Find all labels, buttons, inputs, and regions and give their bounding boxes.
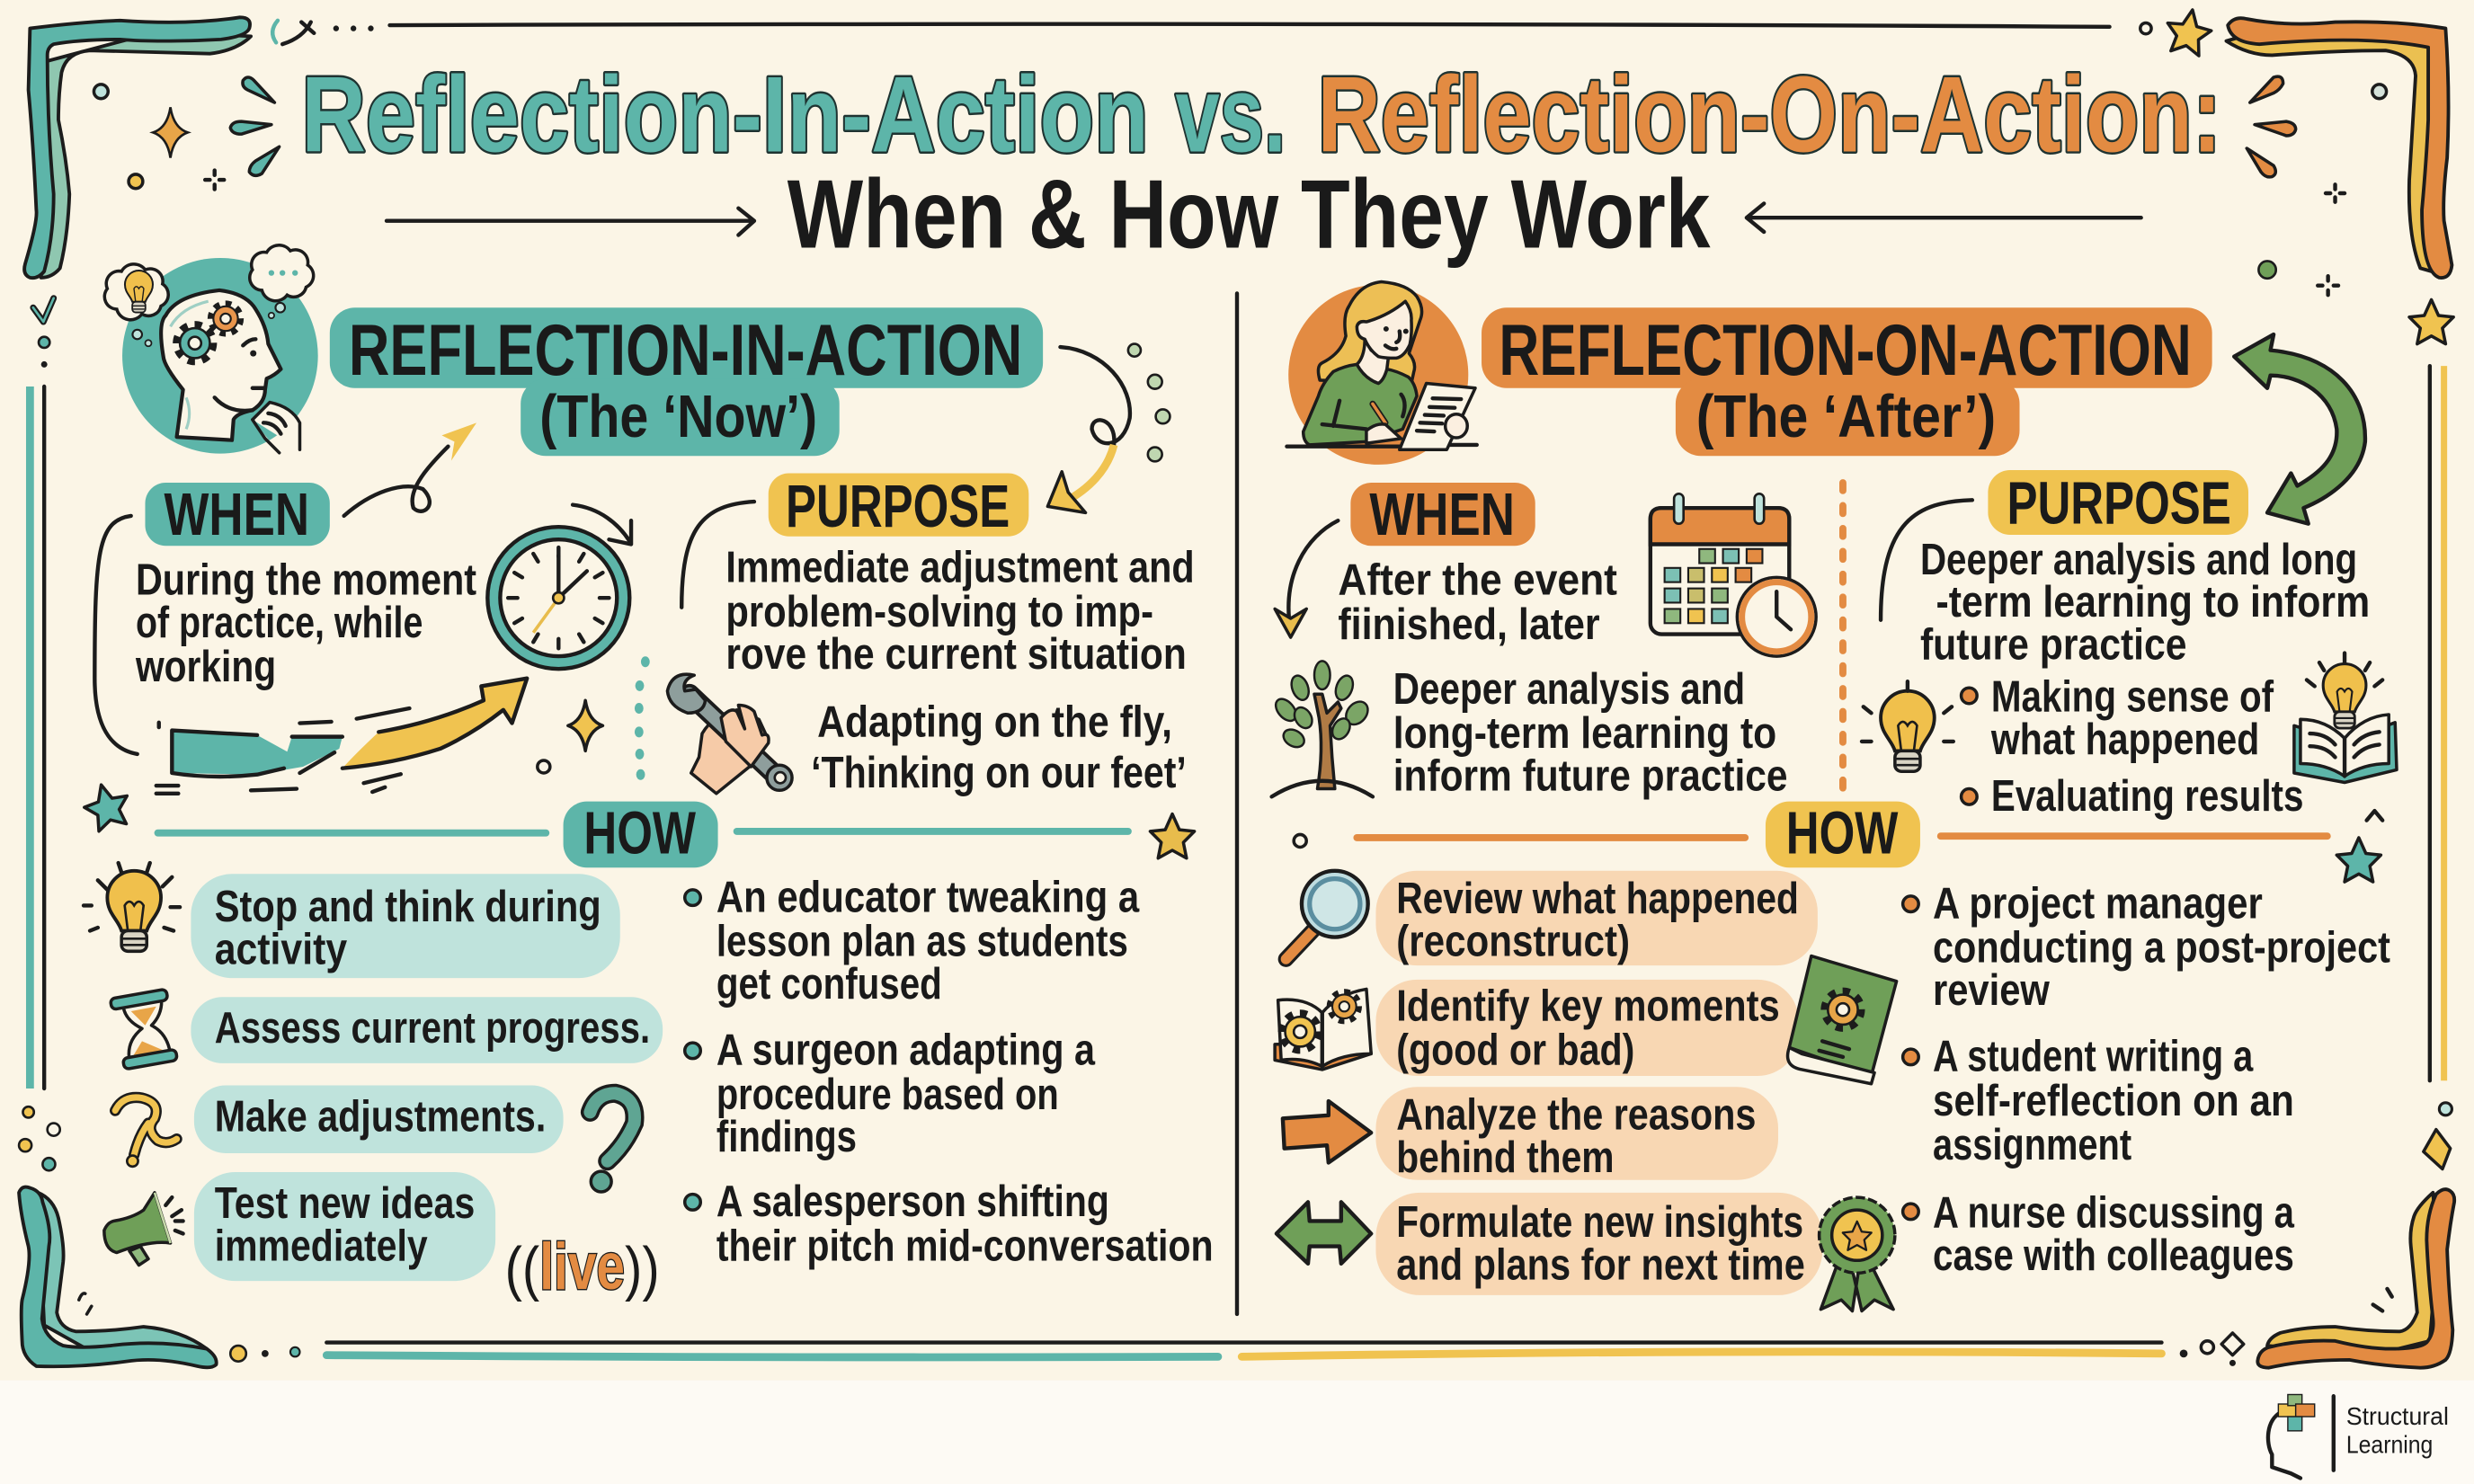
- examples list: in action: get confused: [716, 960, 942, 1009]
- icon: green double arrow: [1277, 1202, 1371, 1264]
- heading: reflection-in-action: REFLECTION-IN-ACTION: [349, 310, 1022, 391]
- when block: During the moment: [136, 556, 476, 605]
- live sound label: ((: [505, 1236, 539, 1302]
- examples list: in action: [685, 873, 1214, 1270]
- text: adapting on the fly: [811, 698, 1187, 797]
- icon: magnifying glass: [1286, 871, 1368, 959]
- examples list: on action: case with colleagues: [1933, 1231, 2294, 1280]
- border: top left corner: [24, 17, 251, 278]
- heading: reflection-in-action: [330, 307, 1043, 456]
- border: top right corner: [2226, 18, 2452, 278]
- live sound label: )): [625, 1236, 660, 1302]
- text: deeper analysis: long-term learning to: [1393, 709, 1776, 758]
- icon: hourglass: [110, 989, 177, 1070]
- step: identify: (good or bad): [1396, 1026, 1634, 1075]
- text: adapting on the fly: ‘Thinking on our feet’: [811, 749, 1187, 797]
- step: identify: [1375, 980, 1799, 1076]
- how heading: HOW: [1786, 800, 1898, 866]
- when block: [94, 482, 476, 754]
- icon: woman writing: [1286, 281, 1477, 465]
- purpose block: [681, 474, 1195, 679]
- icon: orange arrow: [1283, 1101, 1371, 1162]
- text: deeper analysis: [1393, 665, 1788, 800]
- step: analyze: Analyze the reasons: [1396, 1091, 1756, 1140]
- step: make adjustments: [194, 1085, 564, 1153]
- icon: green book: [1788, 956, 1897, 1084]
- examples list: on action: [1903, 879, 2390, 1280]
- examples list: in action: A salesperson shifting: [716, 1177, 1109, 1226]
- icon: yellow question mark: [115, 1097, 177, 1167]
- bullets: sense making: what happened: [1990, 715, 2259, 764]
- arrow: green two-way curve: [2234, 334, 2365, 524]
- bullets: sense making: [1962, 673, 2303, 821]
- examples list: on action: A nurse discussing a: [1933, 1188, 2294, 1237]
- dotted divider: [1841, 483, 1845, 789]
- text: deeper analysis: Deeper analysis and: [1393, 665, 1745, 714]
- when block: WHEN: [1369, 482, 1515, 548]
- step: review: Review what happened: [1396, 875, 1799, 923]
- heading: reflection-on-action: [1482, 307, 2212, 456]
- examples list: in action: their pitch mid-conversation: [716, 1222, 1214, 1270]
- arrow: heading to purpose: [1047, 344, 1170, 512]
- when block: working: [135, 643, 276, 691]
- title line one: Reflection-In-Action: [301, 55, 1149, 174]
- step: review: (reconstruct): [1396, 918, 1630, 966]
- step: review: [1375, 871, 1818, 966]
- border: bottom left corner: [19, 1187, 217, 1367]
- when block: After the event: [1338, 556, 1617, 605]
- icon: calendar with clock: [1651, 493, 1816, 656]
- step: test new ideas: immediately: [215, 1222, 428, 1270]
- live sound label: live: [539, 1229, 625, 1303]
- title line one: vs.: [1176, 55, 1286, 174]
- icon: teal question mark: [590, 1093, 635, 1192]
- icon: clock: [487, 505, 631, 669]
- step: assess progress: Assess current progress.: [215, 1004, 650, 1053]
- examples list: on action: A project manager: [1933, 879, 2263, 928]
- examples list: in action: findings: [716, 1113, 857, 1161]
- examples list: on action: self-reflection on an: [1933, 1077, 2294, 1125]
- center divider: [1236, 293, 1238, 1314]
- dotted connector: [635, 656, 650, 780]
- step: stop and think: activity: [215, 925, 348, 973]
- purpose block: Immediate adjustment and: [725, 544, 1195, 592]
- step: stop and think: [191, 874, 620, 978]
- examples list: in action: An educator tweaking a: [716, 873, 1140, 921]
- step: make adjustments: Make adjustments.: [215, 1092, 546, 1141]
- title line one: [301, 55, 2221, 174]
- purpose block: rove the current situation: [725, 630, 1187, 679]
- purpose block: problem-solving to imp-: [725, 588, 1153, 636]
- examples list: in action: procedure based on: [716, 1071, 1059, 1119]
- how heading: HOW: [583, 800, 696, 866]
- panel: reflection in action: [84, 245, 1214, 1303]
- text: deeper analysis: inform future practice: [1393, 751, 1788, 800]
- step: identify: Identify key moments: [1396, 982, 1780, 1031]
- purpose block: PURPOSE: [786, 474, 1010, 540]
- icon: book with bulb: [2294, 653, 2397, 783]
- border: bottom right corner: [2257, 1189, 2454, 1368]
- purpose block: -term learning to inform: [1936, 578, 2370, 626]
- purpose block: PURPOSE: [2007, 471, 2231, 538]
- examples list: on action: assignment: [1933, 1121, 2131, 1169]
- icon: rosette: [1820, 1197, 1895, 1311]
- step: test new ideas: Test new ideas: [215, 1179, 475, 1228]
- icon: head with gears: [104, 245, 318, 454]
- panel: reflection on action: [1272, 281, 2397, 1311]
- heading: reflection-on-action: REFLECTION-ON-ACTION: [1499, 310, 2192, 391]
- step: test new ideas: [194, 1172, 495, 1281]
- icon: light bulb: [84, 863, 180, 951]
- when block: of practice, while: [136, 599, 423, 647]
- title arrows: [387, 203, 2141, 235]
- how heading: [1357, 800, 2327, 867]
- logo: structural learning: Learning: [2346, 1430, 2433, 1458]
- step: assess progress: [191, 997, 663, 1063]
- examples list: on action: A student writing a: [1933, 1033, 2254, 1081]
- bullets: sense making: Making sense of: [1991, 673, 2274, 722]
- heading: reflection-on-action: (The ‘After’): [1696, 384, 1996, 450]
- step: formulate: Formulate new insights: [1396, 1198, 1803, 1247]
- icon: tree: [1272, 661, 1373, 796]
- arrow: when loop: [344, 422, 476, 516]
- logo: structural learning: Structural: [2346, 1402, 2449, 1430]
- step: analyze: [1375, 1087, 1778, 1182]
- examples list: in action: A surgeon adapting a: [716, 1026, 1096, 1075]
- examples list: in action: lesson plan as students: [716, 918, 1128, 966]
- logo: structural learning: [2268, 1394, 2449, 1479]
- step: analyze: behind them: [1396, 1133, 1614, 1182]
- heading: reflection-in-action: (The ‘Now’): [539, 384, 817, 450]
- when block: fiinished, later: [1338, 600, 1600, 649]
- icon: megaphone: [104, 1193, 183, 1266]
- step: formulate: [1375, 1193, 1822, 1295]
- text: adapting on the fly: Adapting on the fly,: [817, 698, 1172, 747]
- icon: open book with gears: [1275, 989, 1371, 1070]
- how heading: [158, 800, 1128, 867]
- purpose block: future practice: [1920, 621, 2187, 670]
- illustration: torn paper and rising arrow: [156, 679, 527, 794]
- bullets: sense making: Evaluating results: [1991, 772, 2303, 821]
- examples list: on action: review: [1933, 966, 2051, 1015]
- title line one: Reflection-On-Action:: [1318, 55, 2221, 174]
- purpose block: Deeper analysis and long: [1920, 536, 2357, 584]
- icon: bulb: [1862, 681, 1953, 771]
- when block: WHEN: [165, 482, 309, 548]
- step: formulate: and plans for next time: [1396, 1240, 1805, 1289]
- icon: hand with wrench: [667, 674, 792, 794]
- step: stop and think: Stop and think during: [215, 883, 601, 931]
- purpose block: [1881, 470, 2370, 670]
- examples list: on action: conducting a post-project: [1933, 924, 2390, 973]
- when block: [1275, 482, 1617, 649]
- title line two: When & How They Work: [788, 160, 1711, 270]
